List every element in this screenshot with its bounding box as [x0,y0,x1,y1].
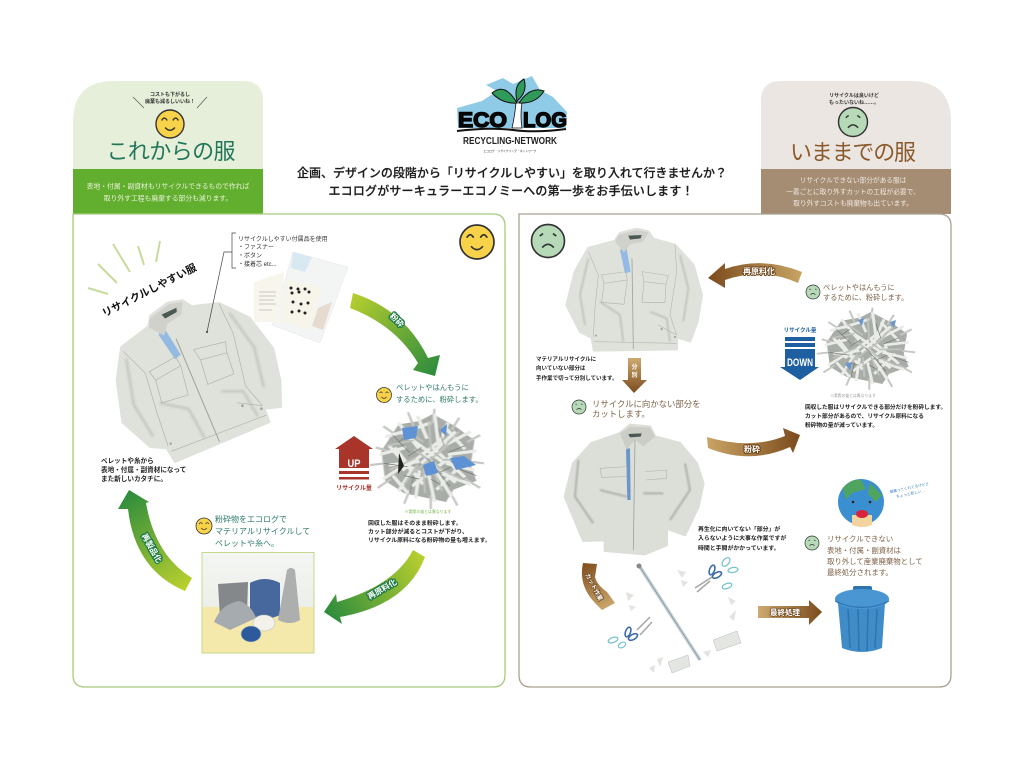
note: material recycling: ペレットや糸へ。 [215,538,279,548]
speech text: recycling wasted: リサイクルは良いけど [829,92,879,99]
panel: current clothes flow [519,214,951,687]
icon: blue trash can [835,586,889,652]
text: new form: また新しいカタチに。 [101,474,167,483]
arrow: cutting work [582,563,615,610]
photo: accessory samples [254,252,348,343]
icon: recycle amount down [780,326,819,380]
description: future clothes: 取り外す工程も廃棄する部分も減ります。 [104,194,232,202]
description: current clothes: 一着ごとに取り外すカットの工程が必要で、 [786,187,920,196]
callout: recyclable accessories [206,233,328,333]
photo: removed zipper, scissors and parts [607,556,741,673]
note: material recycling: 粉砕物をエコログで [215,514,287,524]
speech text: recycling wasted: もったいないね……。 [829,99,879,106]
arrow: final disposal [758,600,822,625]
icon: recycle amount up [335,436,373,492]
heading: future clothes: これからの服 [106,139,236,164]
arrow: final disposal: 最終処理 [770,607,800,617]
text: shredding explanation: 回収した服はリサイクルできる部分だけを粉砕します。 [805,403,946,411]
logo: Eco Log Recycling-Network [457,76,567,153]
headline message [297,165,727,198]
text: shredding explanation: カット部分が減るとコストが下がり、 [368,528,468,536]
speech text: earth [889,481,931,500]
headline message: 企画、デザインの段階から「リサイクルしやすい」を取り入れて行きませんか？ [297,165,727,180]
text: manual separation: 手作業で切って分別しています。 [536,374,618,382]
headline message: エコログがサーキュラーエコノミーへの第一歩をお手伝いします！ [328,183,694,198]
speech text: earth: ちょっと悲しい… [896,488,926,499]
arrow: separation: 分 [631,363,638,371]
note: cutting unsuitable parts: カットします。 [592,409,650,419]
note: final disposal of non-recyclable parts: リサイクルできない [827,534,893,544]
text: shredding explanation: 回収した服はそのまま粉砕します。 [368,519,462,527]
note: final disposal of non-recyclable parts: 表地・付属・副資材は [827,546,902,555]
text: shredding explanation [805,403,946,429]
arrow: cutting work: カット作業 [583,572,605,602]
callout: recyclable accessories: ・接着芯 etc... [238,260,277,268]
jacket photo: before cutting [567,229,702,350]
arrow: remanufacture [118,490,192,591]
icon: large sad face [532,224,564,258]
heading: current clothes: いままでの服 [790,140,916,165]
note: shredding step: ペレットやはんもうに [823,283,895,292]
panel: future clothes header [73,81,263,214]
arrow: shredding: 粉砕 [744,444,760,454]
logo: Eco Log Recycling-Network: RECYCLING-NETWORK [463,135,557,147]
description: future clothes: 表地・付属・副資材もリサイクルできるもので作れば [87,182,250,190]
panel: current clothes header [761,81,951,214]
jacket photo: open jacket [565,425,703,554]
text: manual separation: 向いていない部分は [536,364,586,372]
text: new form [101,456,186,483]
note: shredding step: するために、粉砕します。 [823,293,908,302]
photo: pellets and yarn [202,552,314,653]
text: time and labour: 再生化に向いてない「部分」が [698,525,780,533]
icon: sad face [838,108,868,136]
note: shredding step [376,383,483,404]
speech text: recycling wasted [829,92,879,106]
speech text: cost and waste down: コストも下がるし [150,91,190,98]
icon: recycle amount down: リサイクル量 [784,326,817,334]
arrow: re-materialise: 再原料化 [743,266,775,276]
speech lines [133,97,207,108]
description: current clothes: リサイクルできない部分がある服は [800,176,907,184]
icon: recycle amount up: UP [348,458,360,470]
note: cutting unsuitable parts: リサイクルに向かない部分を [592,399,700,409]
speech text: cost and waste down: 廃棄も減るしいいね！ [145,98,195,105]
text: shredding explanation [368,519,491,544]
arrow: re-materialise [324,550,425,624]
text: manual separation: マテリアルリサイクルに [536,355,596,363]
note: shredding step [806,283,908,302]
callout: recyclable accessories: リサイクルしやすい付属品を使用 [238,235,328,243]
note: cutting unsuitable parts [572,399,700,419]
text: new form: 表地・付属・副資材になって [101,465,186,474]
footnote: shredded scraps: ※実際の量とは異なります [405,509,451,514]
callout: recyclable accessories: ・ファスナー [238,244,274,251]
text: time and labour: 入らないように大事な作業ですが [698,534,786,542]
note: material recycling [196,514,310,548]
text: manual separation [536,355,618,382]
text: new form: ペレットや糸から [101,456,154,465]
arrow: re-materialise [708,263,802,288]
note: final disposal of non-recyclable parts: 取り外して産業廃棄物として [827,557,923,566]
text: time and labour: 時間と手間がかかっています。 [698,544,780,552]
note: material recycling: マテリアルリサイクルして [215,527,310,536]
note: final disposal of non-recyclable parts: 最終処分されます。 [827,568,893,577]
arrow: separation [622,358,647,393]
logo: Eco Log Recycling-Network: LOG [523,109,567,132]
text: shredding explanation: リサイクル原料になる粉砕物の量も増えます。 [368,536,491,544]
text: time and labour [698,525,786,552]
speech text: cost and waste down [145,91,195,105]
arrow: shredding [707,428,800,456]
arrow: shredding [350,293,440,376]
text: shredding explanation: カット部分があるので、リサイクル原料になる [805,412,924,420]
logo: Eco Log Recycling-Network: ECO [458,109,507,132]
arrow: separation: 別 [631,371,638,379]
photo: shredded scraps, small amount [817,308,915,390]
arrow: re-materialise: 再原料化 [366,577,398,601]
arrow: shredding: 粉砕 [388,311,406,329]
note: shredding step: するために、粉砕します。 [396,395,483,404]
arrow: remanufacture: 再製品化 [140,532,164,564]
jacket photo: easy to recycle [88,273,298,474]
logo: Eco Log Recycling-Network: エコログ・リサイクリング・ネットワーク [483,149,537,153]
decoration: rays [88,241,160,294]
callout: recyclable accessories: ・ボタン [238,252,262,260]
photo: shredded scraps, large amount [370,409,484,509]
icon: recycle amount down: DOWN [787,357,813,369]
icon: large happy face [460,225,494,259]
description: current clothes: 取り外すコストも廃棄物も出ています。 [793,198,913,208]
note: final disposal of non-recyclable parts [805,534,923,577]
description: current clothes [786,176,920,208]
panel: future clothes flow [73,214,505,687]
label: easy to recycle clothes: リサイクルしやすい服 [100,262,199,320]
icon: happy face [156,110,184,138]
icon: crying earth [838,479,884,527]
text: shredding explanation: 粉砕物の量が減っています。 [805,421,878,429]
footnote: shredded scraps: ※実際の量とは異なります [830,393,876,398]
note: shredding step: ペレットやはんもうに [396,383,469,392]
speech text: earth: 廃棄ってくれてるけどさ [889,481,930,494]
description: future clothes [87,182,250,202]
icon: recycle amount up: リサイクル量 [336,484,372,492]
